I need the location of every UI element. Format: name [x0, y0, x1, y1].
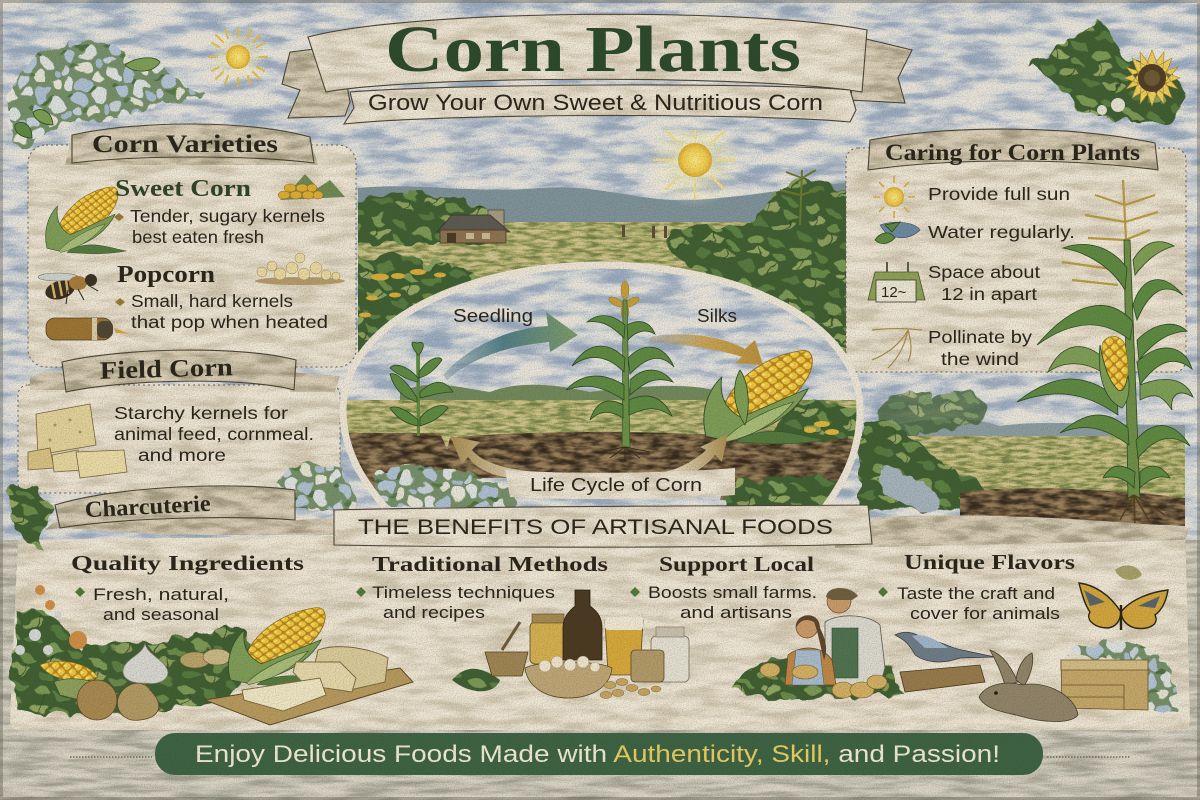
corn ear on stalk: [1099, 336, 1129, 408]
bird: [895, 632, 995, 662]
benefit: unique flavors: Unique Flavors: [904, 550, 1075, 574]
icon: calendar: [868, 262, 925, 302]
benefit: unique flavors: Taste the craft and: [897, 585, 1055, 603]
small corn: [40, 661, 98, 681]
tassel: [1062, 180, 1158, 285]
arrow: return lower right: [665, 434, 728, 480]
soil: [960, 488, 1185, 526]
care: spacing line 1: Space about: [928, 262, 1040, 282]
icon: calendar: 12~: [881, 284, 907, 301]
subtitle text: Grow Your Own Sweet & Nutritious Corn: [368, 90, 823, 115]
woman: [785, 648, 836, 685]
bottom band right tail: [835, 515, 1190, 548]
distant hills: [862, 419, 1185, 445]
log: [900, 665, 985, 692]
subtitle ribbon: [344, 85, 856, 124]
shrub beside charcuterie banner: [275, 463, 365, 515]
label: Silks: Silks: [697, 306, 737, 326]
hills: [358, 183, 846, 222]
oval bush right: [770, 400, 860, 442]
corn field right: [665, 176, 860, 350]
ribbon tails: [30, 372, 340, 392]
roots: [1105, 495, 1165, 525]
big corn ear: [228, 608, 336, 686]
vignette: farmers: [730, 588, 902, 700]
icon: cured sausage: [46, 318, 130, 340]
crate: [1061, 660, 1148, 710]
mature corn ear: [704, 350, 825, 444]
oval soil centre: [447, 432, 734, 478]
heading text: caring: Caring for Corn Plants: [885, 140, 1140, 165]
corn plant: right side: [1017, 180, 1193, 525]
mortar: [485, 652, 528, 676]
icon: left sun: [208, 27, 268, 87]
beer glass: [605, 620, 643, 675]
care: pollinate line 2: the wind: [941, 349, 1019, 369]
trees: [880, 389, 986, 434]
growing corn plant: [566, 281, 674, 462]
sweet corn description: [114, 206, 325, 247]
cutting board: [205, 668, 413, 725]
potatoes: [760, 663, 887, 698]
icon: center sun: [652, 130, 736, 204]
distant figures: [622, 225, 667, 238]
benefit: quality ingredients: [71, 551, 304, 624]
benefit: support local: [630, 552, 817, 622]
ribbon: life cycle: [505, 468, 735, 499]
oval soil right: [720, 438, 854, 500]
icon: popcorn pile: [255, 253, 345, 285]
heading ribbon: caring: [868, 129, 1158, 170]
benefit: traditional methods: Timeless techniques: [372, 584, 555, 602]
heading text: Corn Varieties: Corn Varieties: [92, 131, 278, 158]
stalk: [1124, 240, 1140, 500]
closing banner: Enjoy Delicious Foods Made with Authenticity, Skill, and Passion!: [195, 741, 1000, 768]
popcorn description: [115, 291, 328, 332]
dotted accent left: [70, 756, 152, 758]
label: Seedling: Seedling: [453, 306, 533, 326]
title text: Corn Plants: [385, 13, 801, 86]
oval flowers right: [725, 476, 840, 510]
ribbon: benefits: [334, 505, 872, 547]
benefit: support local: and artisans: [680, 604, 792, 622]
benefit: traditional methods: [356, 552, 608, 622]
vignette: wildlife and crate: [895, 632, 1179, 722]
leaves: [730, 659, 902, 700]
dotted accent right: [1047, 756, 1131, 758]
heading text: benefits: THE BENEFITS OF ARTISANAL FOODS: [358, 515, 833, 539]
man: [825, 616, 885, 685]
popcorn description: Small, hard kernels: [131, 291, 293, 311]
panel: field corn: [18, 350, 340, 493]
garlic: [123, 643, 168, 684]
potatoes: [180, 652, 210, 668]
floral cluster: top right with sunflower: [1030, 20, 1185, 123]
care: spacing line 2: 12 in apart: [941, 284, 1037, 304]
icon: pollen sprig: [872, 328, 922, 368]
vignette: jars and bottles: [452, 590, 689, 698]
cheese blocks: [242, 647, 388, 711]
farmhouse: [437, 210, 510, 243]
oval frame: [343, 265, 860, 507]
small jar: [631, 650, 664, 682]
field corn description line 3: and more: [138, 445, 226, 465]
title banner: [282, 13, 912, 124]
shrub: [1064, 643, 1179, 712]
label: Life Cycle of Corn: Life Cycle of Corn: [530, 474, 702, 495]
ribbon: charcuterie: [45, 486, 340, 535]
benefit: traditional methods: and recipes: [383, 604, 485, 622]
oval flowers left: [372, 466, 520, 510]
sweet corn description: best eaten fresh: [132, 227, 264, 247]
field corn description: Starchy kernels for: [114, 403, 288, 423]
leaves: [1017, 242, 1193, 488]
main ribbon: [308, 14, 867, 92]
rabbit: [979, 650, 1078, 722]
care: pollinate line 1: Pollinate by: [928, 327, 1032, 347]
icon: care sun: [873, 176, 915, 218]
benefit: traditional methods: Traditional Methods: [372, 552, 608, 576]
herbs: [452, 669, 500, 691]
vine left edge: [8, 485, 52, 550]
oval sky: [358, 268, 846, 388]
icon: sweet corn ear: [46, 187, 126, 254]
care: water: Water regularly.: [928, 222, 1075, 242]
arrow: growth to silks: [650, 334, 763, 365]
benefit: quality ingredients: Quality Ingredients: [71, 551, 304, 575]
icon: cheese blocks: [28, 404, 127, 478]
sweet corn heading: Sweet Corn: [115, 176, 251, 202]
vignette: harvest foods: [13, 585, 413, 725]
panel: corn varieties: [28, 124, 356, 367]
icon: butterfly: [1079, 583, 1168, 630]
icon: bee: [38, 273, 98, 304]
closing banner: [155, 733, 1043, 775]
flowers left: [13, 608, 250, 715]
center landscape: [358, 130, 846, 354]
care: full sun: Provide full sun: [928, 184, 1070, 204]
heading text: Field Corn: Field Corn: [99, 354, 233, 385]
popcorn description: that pop when heated: [131, 312, 328, 332]
blue rocks: [878, 466, 943, 510]
icon: water and leaves: [875, 222, 920, 244]
popcorn heading: Popcorn: [117, 262, 215, 288]
bowl: [525, 662, 612, 698]
white jar: [651, 636, 689, 682]
meadow: [358, 222, 846, 354]
oval soil left: [348, 433, 448, 490]
field corn description line 2: animal feed, cornmeal.: [114, 424, 314, 444]
oval field: [340, 400, 865, 448]
crop rows: [870, 436, 1185, 498]
life cycle oval: [340, 262, 865, 510]
benefit: quality ingredients: and seasonal: [103, 606, 219, 624]
floral cluster: top left: [8, 41, 210, 150]
icon: kernels pile: [278, 174, 345, 200]
honey jar: [530, 622, 566, 664]
benefit: support local: Boosts small farms.: [648, 584, 817, 602]
benefit: unique flavors: cover for animals: [910, 605, 1060, 623]
landscape: right field: [860, 389, 1185, 526]
arrow: seedling to growth: [443, 312, 578, 380]
benefit: unique flavors: [878, 550, 1075, 623]
corn tassel in field: [780, 170, 822, 225]
tree line: [350, 193, 504, 245]
benefit: support local: Support Local: [659, 552, 814, 576]
heading ribbon: Field Corn: [62, 350, 296, 392]
bottle: [563, 590, 602, 660]
panel: caring for corn plants: [846, 129, 1186, 372]
seedling plant: [390, 342, 453, 436]
heading ribbon: Corn Varieties: [65, 124, 318, 165]
background: cloudy sky: [0, 0, 1200, 540]
oval horizon trees: [400, 384, 712, 400]
benefit: quality ingredients: Fresh, natural,: [93, 586, 229, 604]
ribbon tail: right: [850, 38, 912, 103]
sweet corn description: Tender, sugary kernels: [130, 206, 325, 226]
tassel: [607, 281, 641, 319]
bottom panel: benefits background: [10, 525, 1190, 730]
heading text: charcuterie: Charcuterie: [84, 491, 211, 522]
nuts: [600, 678, 661, 698]
flowering shrubs left: [358, 252, 475, 353]
ribbon tail: left: [282, 46, 350, 118]
arrow: return lower left: [450, 436, 540, 480]
icon: small insect: [1115, 565, 1142, 580]
bushes: [860, 420, 1000, 512]
onions: [77, 680, 117, 720]
